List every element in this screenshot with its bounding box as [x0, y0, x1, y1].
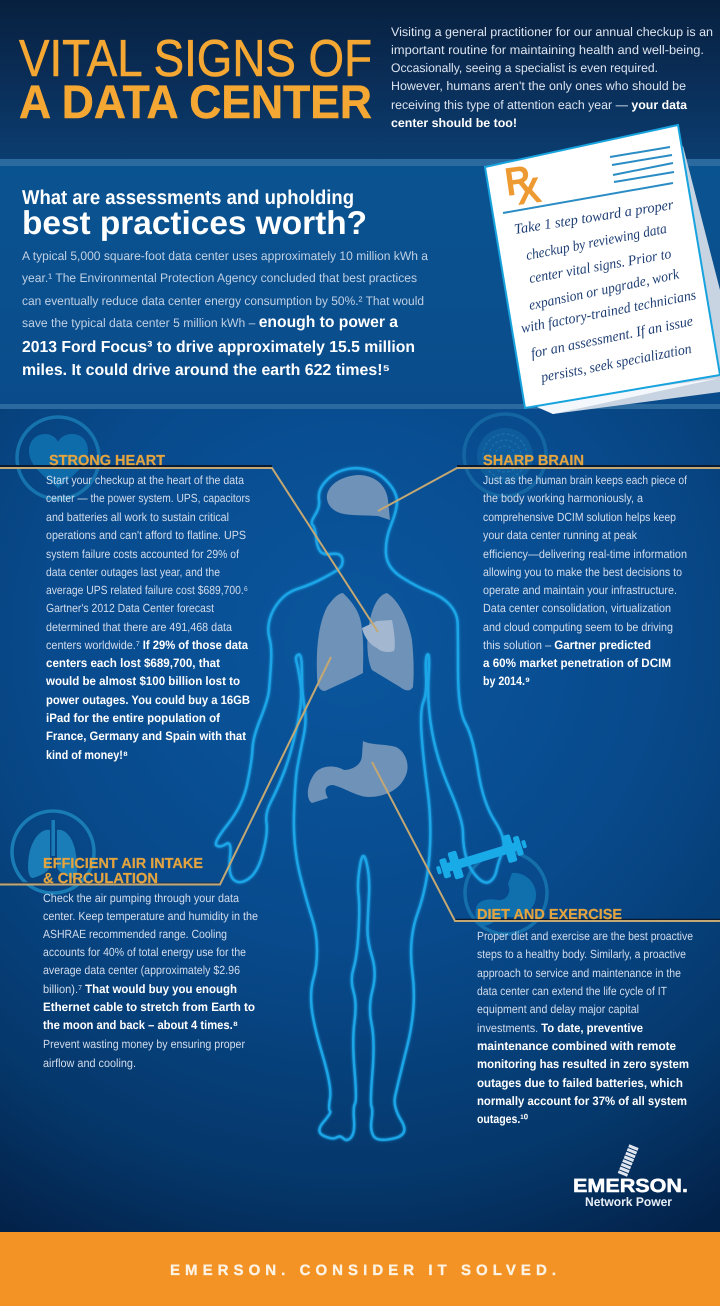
- text: strong heart: system failure costs accounted for 29% of: [46, 547, 240, 561]
- assessment text: can eventually reduce data center energy consumption by 50%.² That would: [22, 294, 424, 308]
- organ: brain: [327, 475, 390, 520]
- handwritten note: center vital signs. Prior to: [528, 246, 673, 287]
- text: efficient air intake: average data center (approximately $2.96: [43, 963, 240, 977]
- assessment text: A typical 5,000 square-foot data center uses approximately 10 million kWh a: [22, 249, 428, 263]
- intro text: Occasionally, seeing a specialist is even required.: [391, 61, 658, 75]
- footer band: [0, 1232, 720, 1306]
- text: efficient air intake: ASHRAE recommended range. Cooling: [43, 927, 227, 941]
- assessment text: miles. It could drive around the earth 622 times!⁵: [22, 362, 390, 379]
- text: diet and exercise: outages.¹⁰: [477, 1112, 528, 1126]
- intro text: Visiting a general practitioner for our annual checkup is an: [391, 25, 713, 39]
- text: efficient air intake: billion).⁷ That would buy you enough: [43, 982, 237, 996]
- assessment text: 2013 Ford Focus³ to drive approximately 15.5 million: [22, 339, 415, 356]
- handwritten note: [513, 197, 698, 386]
- text: strong heart: kind of money!⁸: [46, 748, 128, 762]
- intro text: important routine for maintaining health and well-being.: [391, 43, 704, 57]
- assessment heading: best practices worth?: [22, 204, 367, 241]
- Rx symbol: R: [502, 158, 534, 205]
- handwritten note: for an assessment. If an issue: [530, 313, 695, 362]
- organ: heart: [362, 620, 395, 652]
- assessment panel background: [0, 165, 720, 406]
- text: sharp brain: Just as the human brain keeps each piece of: [483, 473, 688, 487]
- text: diet and exercise: equipment and delay major capital: [477, 1002, 639, 1016]
- handwritten note: expansion or upgrade, work: [528, 266, 681, 314]
- logo: Emerson Network Power: EMERSON.: [573, 1176, 688, 1197]
- logo emblem: [618, 1144, 639, 1177]
- footer tagline: EMERSON. CONSIDER IT SOLVED.: [170, 1262, 556, 1279]
- handwritten note: persists, seek specialization: [539, 341, 693, 386]
- heading: efficient air intake: [43, 856, 203, 887]
- icon: heart: [17, 417, 99, 499]
- assessment heading: What are assessments and upholding: [22, 187, 354, 209]
- logo: Emerson Network Power: Network Power: [585, 1195, 672, 1209]
- text: sharp brain: Data center consolidation, virtualization: [483, 601, 671, 615]
- text: efficient air intake: Prevent wasting money by ensuring proper: [43, 1037, 245, 1051]
- section: efficient air intake: [43, 856, 258, 1070]
- text: strong heart: France, Germany and Spain with that: [46, 729, 246, 743]
- text: efficient air intake: center. Keep temperature and humidity in the: [43, 909, 258, 923]
- assessment text: save the typical data center 5 million kWh – enough to power a: [22, 314, 398, 331]
- section: diet and exercise: [477, 907, 693, 1126]
- assessment heading: [22, 187, 367, 241]
- connector: brain: [378, 466, 720, 511]
- icon: brain: [464, 414, 546, 496]
- text: efficient air intake: airflow and cooling.: [43, 1056, 136, 1070]
- connector: heart: [0, 466, 378, 632]
- heading: strong heart: STRONG HEART: [49, 453, 165, 469]
- title: VITAL SIGNS OF: [19, 30, 372, 88]
- text: sharp brain: [483, 473, 688, 688]
- text: efficient air intake: Ethernet cable to stretch from Earth to: [43, 1000, 255, 1014]
- text: diet and exercise: outages due to failed batteries, which: [477, 1076, 683, 1090]
- organ: lungs: [317, 593, 414, 691]
- text: diet and exercise: investments. To date, preventive: [477, 1021, 643, 1035]
- text: diet and exercise: normally account for 37% of all system: [477, 1094, 687, 1108]
- main panel background: [0, 409, 720, 1232]
- text: efficient air intake: [43, 891, 258, 1070]
- text: sharp brain: allowing you to make the best decisions to: [483, 565, 682, 579]
- text: efficient air intake: accounts for 40% of total energy use for the: [43, 945, 246, 959]
- text: sharp brain: and cloud computing seem to be driving: [483, 620, 673, 634]
- handwritten note: checkup by reviewing data: [525, 221, 668, 264]
- section: sharp brain: [483, 453, 688, 688]
- text: strong heart: would be almost $100 billion lost to: [45, 674, 240, 688]
- heading: efficient air intake: & CIRCULATION: [43, 871, 158, 887]
- assessment text: [22, 249, 428, 379]
- connector: air: [0, 657, 331, 884]
- assessment text: year.¹ The Environmental Protection Agency concluded that best practices: [22, 271, 417, 285]
- connector: diet: [372, 762, 720, 921]
- text: diet and exercise: Proper diet and exercise are the best proactive: [477, 929, 693, 943]
- text: strong heart: and batteries all work to sustain critical: [46, 510, 229, 524]
- text: strong heart: average UPS related failure cost $689,700.⁶: [46, 583, 248, 597]
- text: sharp brain: efficiency—delivering real-time information: [483, 547, 687, 561]
- text: sharp brain: your data center running at peak: [483, 528, 637, 542]
- text: strong heart: data center outages last year, and the: [46, 565, 220, 579]
- logo: Emerson Network Power: [573, 1144, 688, 1209]
- text: sharp brain: this solution – Gartner predicted: [483, 638, 651, 652]
- text: efficient air intake: the moon and back – about 4 times.⁸: [43, 1018, 238, 1032]
- text: diet and exercise: [477, 929, 693, 1126]
- text: diet and exercise: steps to a healthy body. Similarly, a proactive: [477, 947, 686, 961]
- text: diet and exercise: data center can extend the life cycle of IT: [477, 984, 667, 998]
- intro text: However, humans aren't the only ones who should be: [391, 79, 686, 93]
- section: strong heart: [45, 453, 250, 762]
- text: strong heart: Gartner's 2012 Data Center forecast: [46, 601, 215, 615]
- intro text: receiving this type of attention each year — your data: [391, 98, 687, 112]
- icon: stomach: [465, 852, 547, 934]
- prescription note: [485, 125, 720, 414]
- note header lines: [503, 147, 674, 213]
- organ: stomach: [308, 741, 408, 803]
- heading: diet and exercise: DIET AND EXERCISE: [477, 907, 622, 923]
- text: diet and exercise: monitoring has resulted in zero system: [477, 1057, 689, 1071]
- title: [19, 30, 372, 128]
- text: strong heart: operations and can't afford to flatline. UPS: [46, 528, 246, 542]
- text: strong heart: power outages. You could buy a 16GB: [46, 693, 250, 707]
- text: strong heart: Start your checkup at the heart of the data: [46, 473, 244, 487]
- heading: sharp brain: SHARP BRAIN: [483, 453, 584, 469]
- text: sharp brain: operate and maintain your infrastructure.: [483, 583, 677, 597]
- icon: lungs: [12, 811, 94, 893]
- intro text: center should be too!: [391, 116, 517, 130]
- text: sharp brain: the body working harmoniously, a: [483, 491, 643, 505]
- heading: efficient air intake: EFFICIENT AIR INTAKE: [43, 856, 203, 872]
- text: strong heart: [45, 473, 250, 762]
- text: strong heart: center — the power system. UPS, capacitors: [46, 491, 250, 505]
- human body outline: [216, 468, 504, 1140]
- text: strong heart: determined that there are 491,468 data: [46, 620, 232, 634]
- text: sharp brain: comprehensive DCIM solution helps keep: [483, 510, 676, 524]
- text: sharp brain: by 2014.⁹: [483, 674, 530, 688]
- text: diet and exercise: maintenance combined with remote: [477, 1039, 676, 1053]
- text: strong heart: centers each lost $689,700, that: [46, 656, 220, 670]
- text: sharp brain: a 60% market penetration of DCIM: [483, 656, 671, 670]
- icon: dumbbell: [433, 830, 530, 884]
- text: strong heart: centers worldwide.⁷ If 29% of those data: [46, 638, 248, 652]
- text: diet and exercise: approach to service and maintenance in the: [477, 966, 681, 980]
- handwritten note: with factory-trained technicians: [520, 287, 698, 337]
- Rx symbol: X: [513, 169, 544, 213]
- text: strong heart: iPad for the entire population of: [46, 711, 221, 725]
- intro text: [391, 25, 713, 130]
- header background: [0, 0, 720, 160]
- handwritten note: Take 1 step toward a proper: [513, 197, 675, 238]
- title: A DATA CENTER: [19, 75, 372, 128]
- text: efficient air intake: Check the air pumping through your data: [43, 891, 239, 905]
